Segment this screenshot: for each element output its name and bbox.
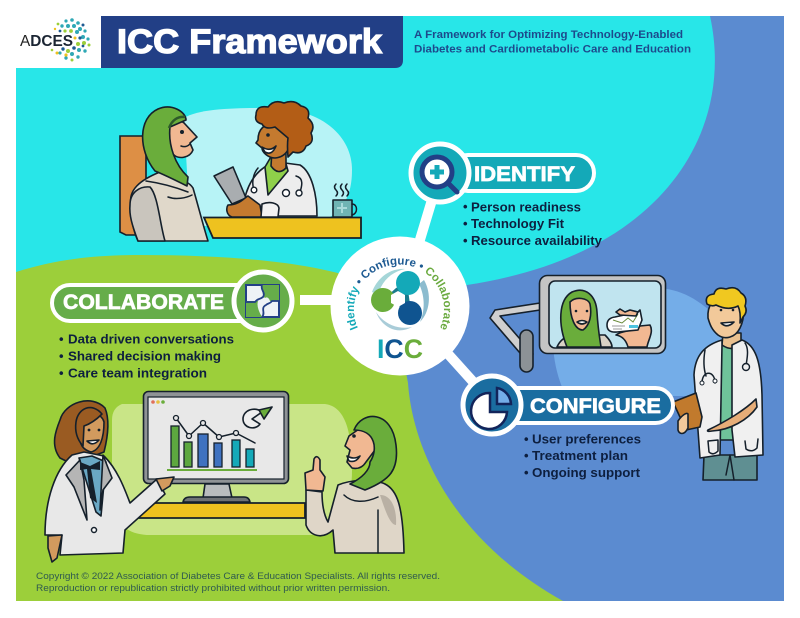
panel: configure xyxy=(463,376,673,480)
blob: light green behind data review xyxy=(112,404,352,535)
icon: puzzle xyxy=(234,272,292,330)
configure list xyxy=(524,432,641,480)
icon: magnifier xyxy=(411,144,469,202)
configure list: • xyxy=(524,448,529,463)
copyright xyxy=(36,571,440,594)
identify list: • xyxy=(463,233,468,248)
configure heading: CONFIGURE xyxy=(530,395,661,418)
copyright: Copyright © 2022 Association of Diabetes Care & Education Specialists. All rights reserved. xyxy=(36,571,440,582)
collaborate list xyxy=(59,332,234,380)
hub circle xyxy=(330,236,470,376)
title: ICC Framework xyxy=(117,23,382,61)
illustration: clinician with clipboard xyxy=(673,288,763,480)
configure banner xyxy=(490,388,673,423)
logo backing xyxy=(0,0,101,68)
clinician xyxy=(214,102,317,217)
configure list: User preferences xyxy=(532,432,641,446)
copyright: Reproduction or republication strictly prohibited without prior written permission. xyxy=(36,583,390,594)
blob: light blue behind telehealth xyxy=(553,288,740,396)
panel: collaborate xyxy=(52,272,292,380)
identify banner xyxy=(450,155,594,191)
configure list: Treatment plan xyxy=(532,448,628,463)
identify list: Person readiness xyxy=(471,200,581,214)
bar chart xyxy=(171,426,254,467)
collaborate list: Shared decision making xyxy=(68,348,221,364)
chair xyxy=(120,136,146,235)
blob: light cyan behind consultation xyxy=(184,108,352,226)
patient pointing xyxy=(305,416,404,553)
pie icon xyxy=(243,409,262,428)
configure list: • xyxy=(524,432,529,446)
collaborate list: • xyxy=(59,332,64,346)
logo: ADCES xyxy=(20,18,90,62)
identify list xyxy=(463,199,603,248)
collaborate list: • xyxy=(59,366,64,380)
phone held in hand xyxy=(607,309,651,347)
identify list: • xyxy=(463,199,468,214)
curved label: Identify • Configure • Collaborate xyxy=(346,257,450,330)
illustration: telehealth screen on arm xyxy=(490,276,666,372)
ICC wordmark: ICC xyxy=(377,334,423,364)
identify heading: IDENTIFY xyxy=(474,163,575,186)
mug xyxy=(333,184,356,217)
collaborate banner xyxy=(52,285,272,321)
identify list: Resource availability xyxy=(471,233,603,248)
table xyxy=(204,218,361,238)
connectors xyxy=(300,180,485,395)
presenter xyxy=(45,401,174,562)
icc logo mark xyxy=(371,269,429,330)
collaborate list: Care team integration xyxy=(68,366,207,380)
subtitle: A Framework for Optimizing Technology-Enabled xyxy=(414,29,683,41)
logo: ADCES: ADCES xyxy=(20,33,73,50)
configure list: Ongoing support xyxy=(532,465,641,480)
collaborate list: • xyxy=(59,348,64,364)
icon: pie chart xyxy=(463,376,521,434)
subtitle: Diabetes and Cardiometabolic Care and Education xyxy=(414,44,691,56)
patient xyxy=(130,107,208,241)
collaborate heading: COLLABORATE xyxy=(63,291,224,314)
identify list: • xyxy=(463,216,468,231)
panel: identify xyxy=(411,144,603,248)
illustration: data review xyxy=(45,392,404,562)
table xyxy=(120,503,305,518)
monitor arm xyxy=(490,303,540,372)
configure list: • xyxy=(524,465,529,480)
patient on screen xyxy=(557,290,612,347)
background panel: identify cyan xyxy=(16,16,715,295)
background panel: collaborate green xyxy=(16,255,563,601)
collaborate list: Data driven conversations xyxy=(68,332,234,346)
monitor xyxy=(144,392,288,502)
subtitle xyxy=(414,29,691,56)
identify list: Technology Fit xyxy=(471,216,565,231)
illustration: patient and clinician consultation xyxy=(120,102,361,241)
header banner xyxy=(101,16,403,68)
